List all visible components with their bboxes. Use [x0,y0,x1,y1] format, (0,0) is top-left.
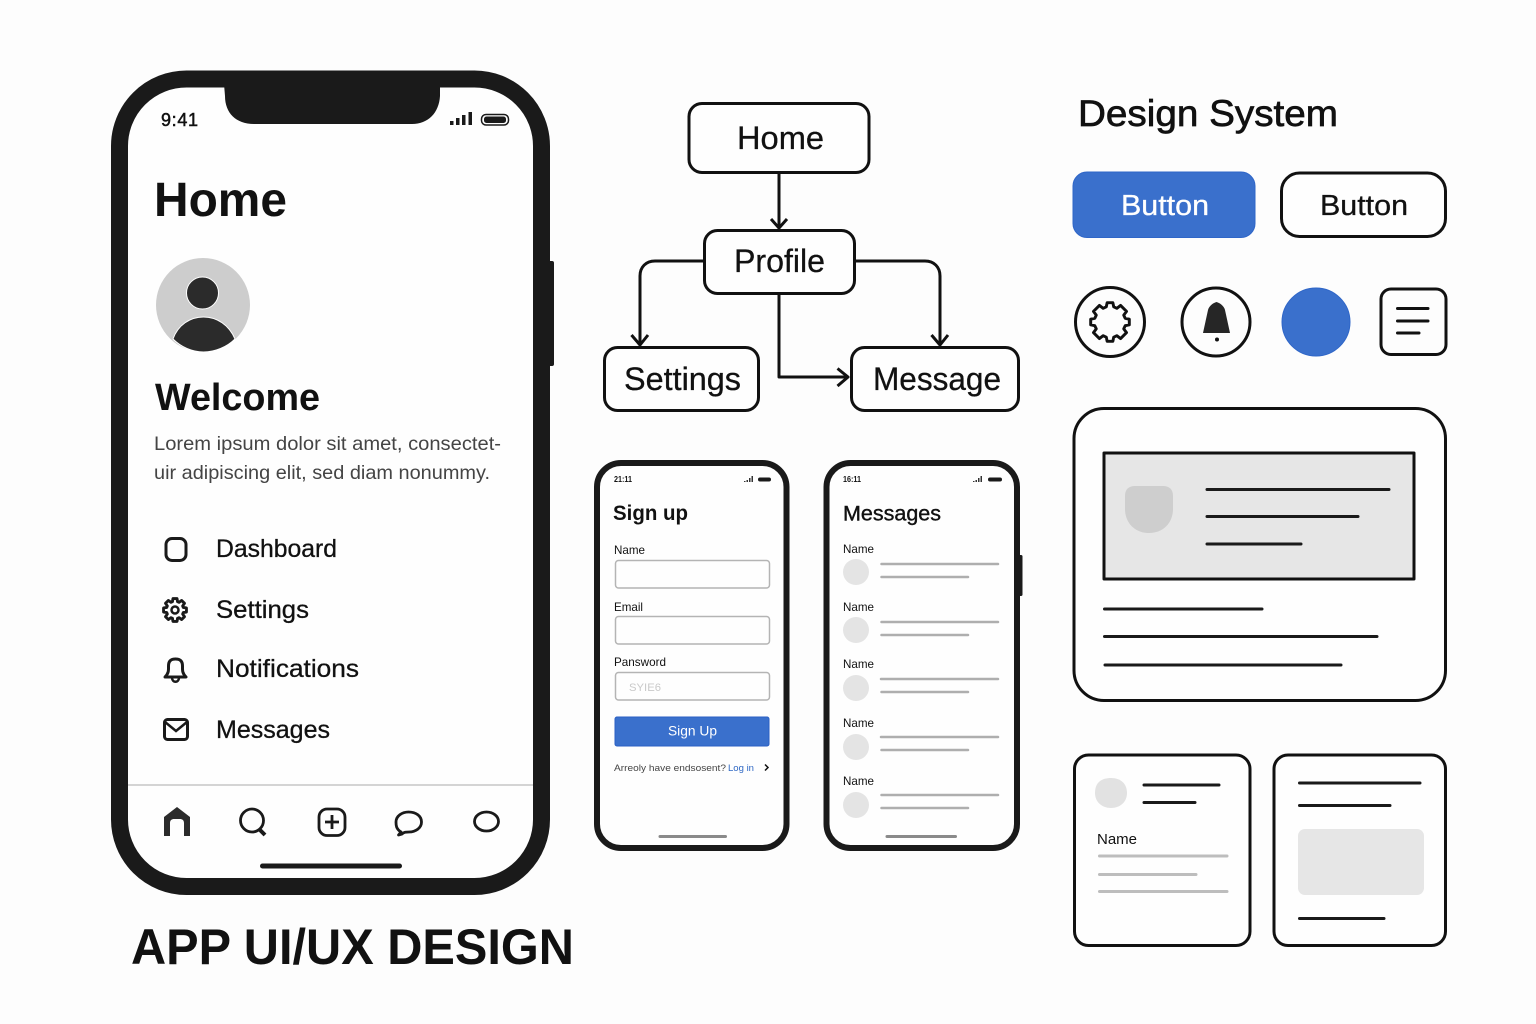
connector arrows [632,173,948,386]
email field [614,600,770,644]
password field: SYIE6 [629,682,661,694]
status bar time: 9:41 [161,110,198,130]
tab icon: chat [396,812,422,835]
sign up phone [597,463,786,848]
flow diagram [604,104,1018,410]
home indicator [260,864,402,868]
profile card avatar [1095,778,1127,808]
menu item: messages [164,716,330,744]
media card outline [1274,755,1446,946]
messages status bar: 16:11 [843,474,861,484]
main title: APP UI/UX DESIGN [131,919,574,975]
icon: gear in circle [1076,288,1144,356]
welcome body text [154,433,501,484]
email field: Email [614,600,643,614]
phone frame [120,79,542,886]
messages side button [1017,555,1022,596]
welcome body text: Lorem ipsum dolor sit amet, consectet- [154,433,501,455]
sign up heading: Sign up [613,502,688,525]
login prompt: Arreoly have endsosent? [614,763,726,774]
status bar signal [450,112,472,125]
welcome body text: uir adipiscing elit, sed diam nonummy. [154,462,490,484]
node: message [852,348,1018,410]
message row 4 [843,716,998,760]
node: profile: Profile [734,243,825,279]
card body text lines [1104,609,1377,665]
card media text lines [1207,490,1389,544]
menu item: settings [164,596,309,624]
avatar [156,258,250,352]
tab bar divider [128,784,533,786]
message row 2 [843,600,998,643]
node: message: Message [873,361,1001,397]
message row 5 [843,774,998,818]
menu item: dashboard: Dashboard [216,535,337,563]
messages heading: Messages [843,502,941,526]
message row 1: Name [843,542,874,556]
welcome heading: Welcome [155,377,320,419]
node: home: Home [737,120,824,156]
message row 4: Name [843,716,874,730]
sign up status bar: 21:11 [614,474,632,484]
outline button: Button [1320,190,1408,222]
screen heading: Home [154,174,287,227]
profile card name: Name [1097,832,1137,848]
tab icon: search [240,809,265,835]
menu item: messages: Messages [216,716,330,744]
icon: bell in circle [1182,288,1250,356]
card outline [1074,408,1446,700]
large card component [1074,408,1446,700]
phone notch [224,84,440,124]
sign up button [615,717,769,746]
password field [614,655,770,700]
tab icon: profile oval [474,812,498,831]
login prompt [614,763,768,774]
node: settings [604,348,758,410]
name field [614,543,770,588]
name field: Name [614,543,645,557]
media card footer line [1300,917,1384,920]
small card: profile [1074,755,1250,946]
tab icon: home [164,807,190,836]
message row 3 [843,657,998,701]
card avatar placeholder [1125,486,1173,533]
phone side button [546,261,554,366]
profile card outline [1074,755,1250,946]
profile card dark lines [1144,785,1219,802]
main phone mockup [120,79,554,886]
sign up phone frame [597,463,786,848]
design system heading: Design System [1078,93,1338,134]
status bar battery [482,114,508,125]
icon: blue circle [1282,288,1350,356]
outline button [1282,173,1446,236]
sign up status bar [614,474,771,484]
menu item: notifications: Notifications [216,655,359,683]
card media block [1104,453,1414,579]
password field: Pansword [614,655,666,669]
messages status bar [843,474,1002,484]
icon: menu lines [1381,289,1446,354]
node: settings: Settings [624,361,741,397]
message row 5: Name [843,774,874,788]
sign up button: Sign Up [668,724,717,738]
node: home [689,104,869,172]
messages phone frame [826,463,1017,848]
profile card gray lines [1100,856,1227,892]
primary button: Button [1121,190,1209,222]
login prompt: Log in [728,763,754,774]
media card image placeholder [1298,829,1424,895]
message row 3: Name [843,657,874,671]
menu item: settings: Settings [216,596,309,624]
messages home indicator [886,835,957,838]
small card: media [1274,755,1446,946]
messages phone [826,463,1022,848]
message row 1 [843,542,998,585]
sign up home indicator [658,835,727,838]
node: profile [704,230,854,294]
media card title lines [1300,783,1420,806]
message row 2: Name [843,600,874,614]
primary button [1073,172,1255,238]
tab icon: add [319,809,345,836]
